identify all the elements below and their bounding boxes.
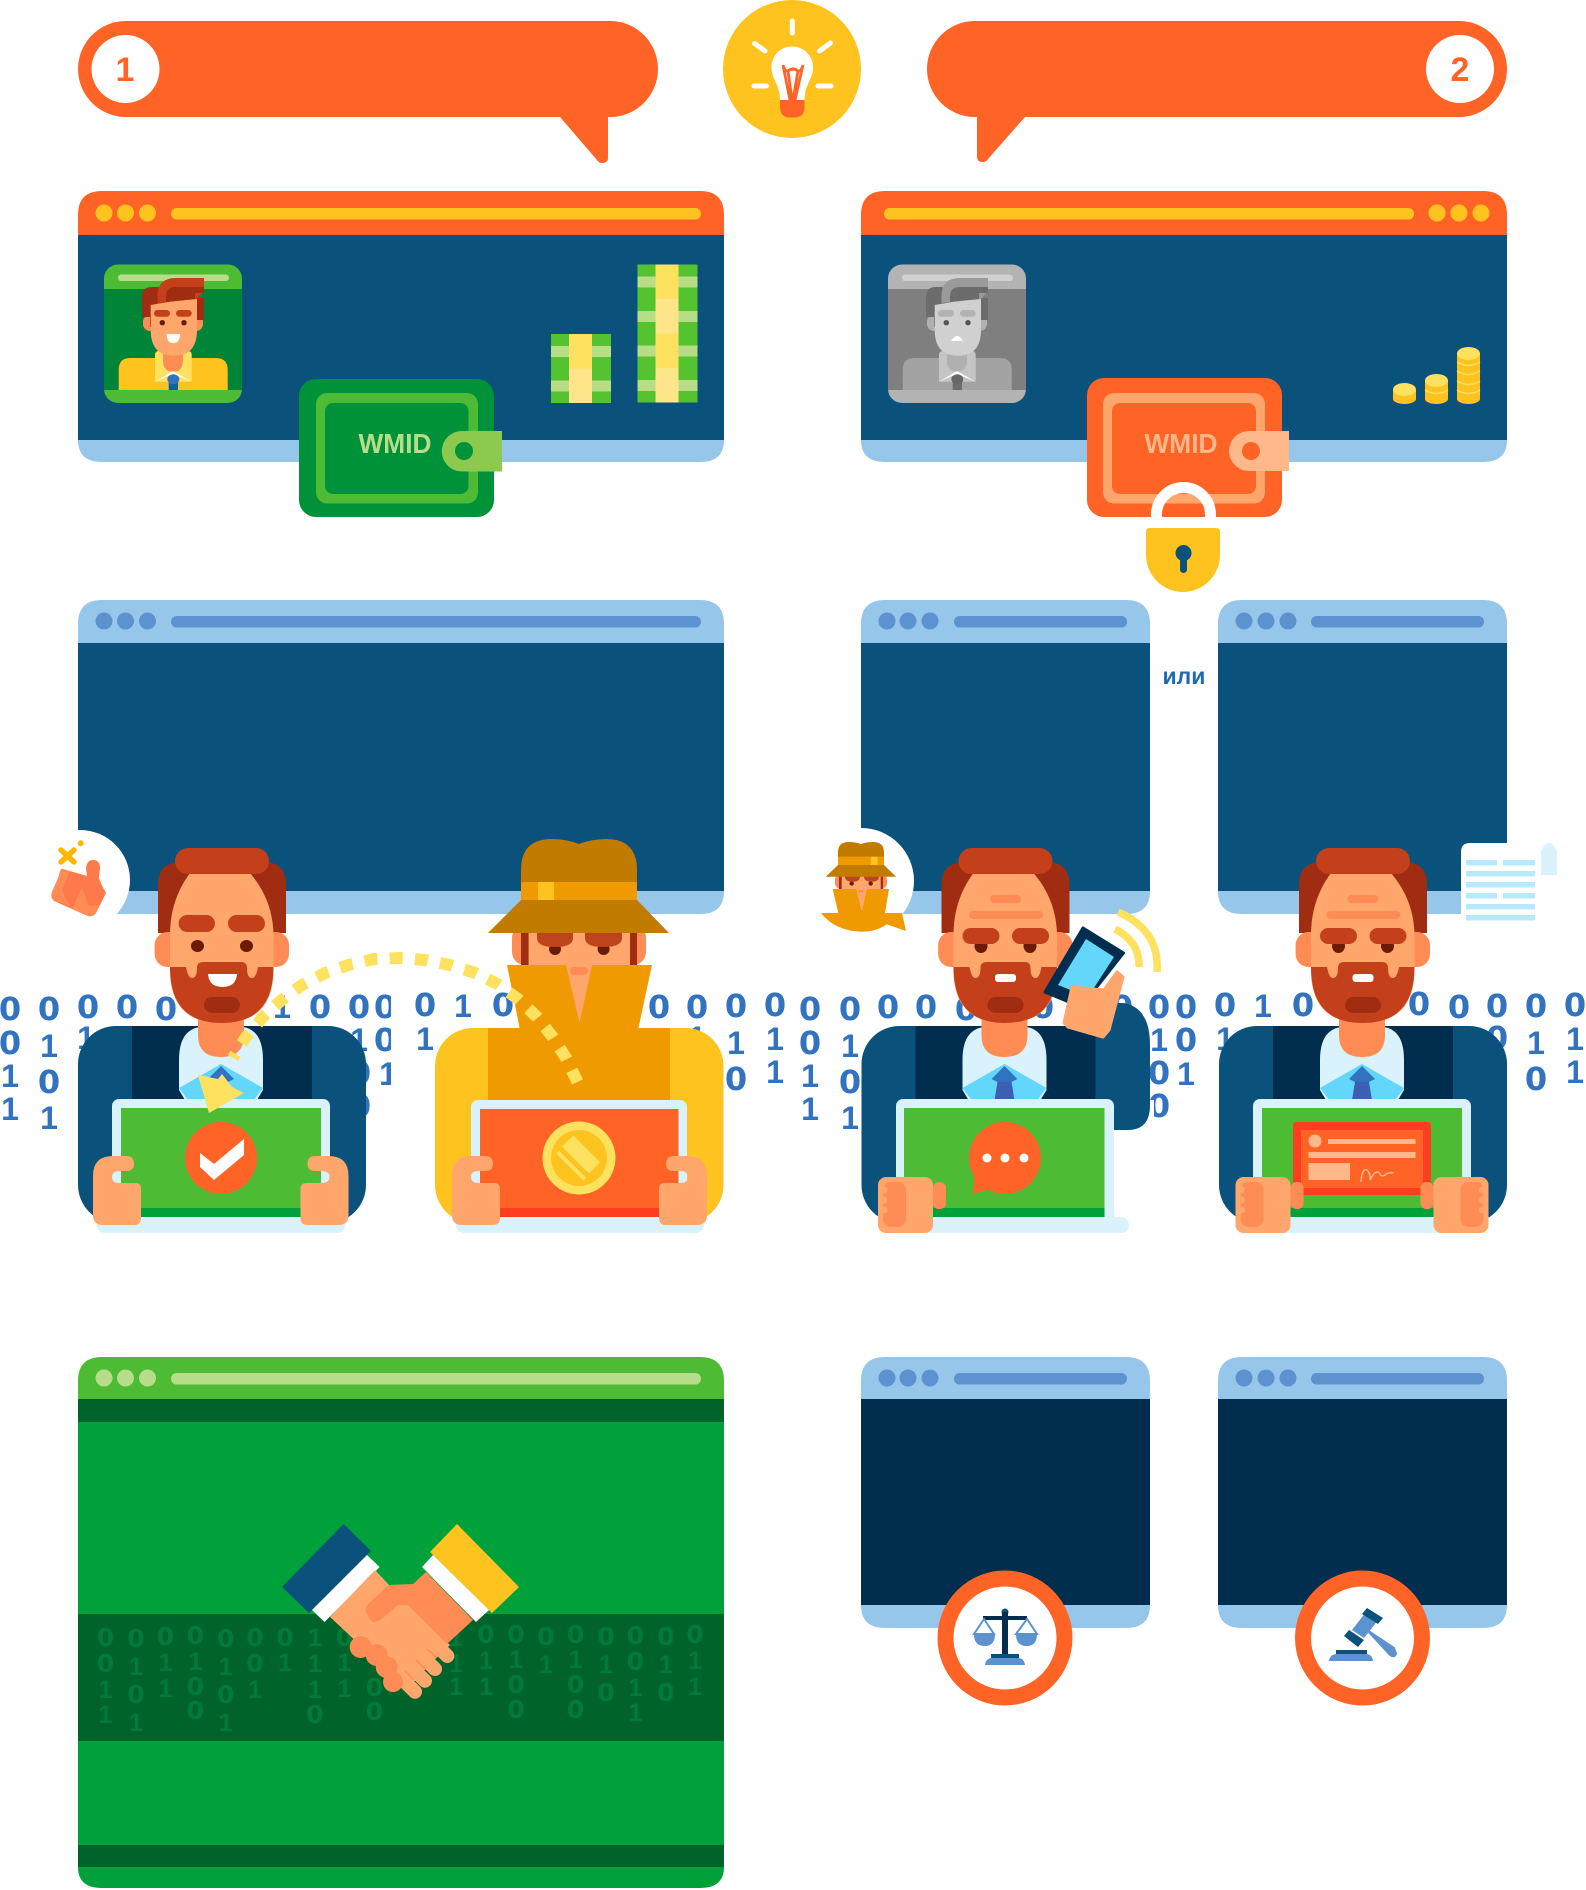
binary digits in band: 1 <box>308 1676 322 1704</box>
binary digits in band: 1 <box>158 1675 172 1703</box>
binary digits background right: 1 <box>1216 1021 1234 1057</box>
binary digits background centre: 0 <box>648 988 670 1026</box>
binary digits background right: 0 <box>1214 986 1236 1024</box>
binary digits in band: 0 <box>127 1680 145 1709</box>
panel: browser window with green wallet <box>78 191 724 517</box>
binary digits background centre: 0 <box>764 986 786 1024</box>
binary digits in band: 0 <box>217 1680 234 1709</box>
panel: large browser window <box>78 600 724 914</box>
binary digits background left <box>0 994 391 1129</box>
binary digits background mid right: 0 <box>799 1024 821 1062</box>
binary digits background left: 0 <box>77 988 99 1026</box>
binary digits in band: 0 <box>537 1622 555 1651</box>
binary digits background right: 1 <box>1527 1025 1545 1061</box>
binary digits background mid right: 0 <box>1111 988 1133 1026</box>
binary digits background mid right: 0 <box>877 988 899 1026</box>
binary digits in band: 0 <box>97 1623 114 1652</box>
binary digits in band: 0 <box>597 1678 615 1707</box>
binary digits background mid right: 0 <box>839 990 861 1028</box>
binary digits in band: 1 <box>219 1653 233 1681</box>
binary digits in band: 1 <box>688 1673 702 1701</box>
binary digits background mid right: 0 <box>1175 988 1197 1026</box>
binary digits in band: 1 <box>338 1675 352 1703</box>
binary digits background centre <box>414 986 786 1098</box>
binary digits in band: 0 <box>627 1621 644 1650</box>
icon: gavel in ring <box>1303 1578 1422 1698</box>
tablet <box>97 1099 345 1233</box>
person: spy with hat and tablet <box>435 839 724 1233</box>
raised arm <box>1100 1003 1150 1130</box>
panel: law window with gavel <box>1218 1357 1507 1698</box>
eyebrows and eyes <box>179 915 265 987</box>
binary digits in band <box>97 1620 704 1737</box>
binary digits background left: 0 <box>348 988 370 1026</box>
icon: handshake <box>282 1524 519 1692</box>
binary digits background left: 0 <box>309 988 331 1026</box>
binary digits in band: 0 <box>336 1623 353 1652</box>
binary digits background right: 0 <box>1564 986 1586 1024</box>
binary digits background left: 0 <box>349 1087 371 1125</box>
binary digits in band: 0 <box>187 1696 204 1725</box>
binary digits in band: 1 <box>629 1674 643 1702</box>
binary digits background right <box>1214 985 1586 1098</box>
binary digits background mid right: 0 <box>1148 1054 1170 1092</box>
binary digits background centre: 1 <box>416 1021 434 1057</box>
binary digits background right: 0 <box>1525 987 1547 1025</box>
binary digits background right: 1 <box>1566 1054 1584 1090</box>
green WMID wallet: WMID <box>358 428 432 459</box>
number 1: 1 <box>116 51 134 89</box>
binary digits in band: 0 <box>597 1622 615 1651</box>
person: bearded man with contract <box>1219 848 1507 1233</box>
binary digits background right: 0 <box>1408 985 1430 1023</box>
binary digits in band: 1 <box>569 1646 583 1674</box>
binary digits background mid right: 0 <box>1148 1087 1170 1125</box>
binary digits in band: 0 <box>187 1621 204 1650</box>
binary digits in band: 1 <box>129 1709 143 1737</box>
binary digits in band: 0 <box>627 1647 644 1676</box>
binary digits background left: 1 <box>379 1056 397 1092</box>
binary digits in band: 1 <box>338 1649 352 1677</box>
binary digits in band: 0 <box>306 1700 324 1729</box>
icon: mini spy bubble <box>808 828 914 934</box>
binary digits in band: 1 <box>479 1647 493 1675</box>
laptop <box>890 1099 1129 1233</box>
binary digits in band: 0 <box>567 1620 584 1649</box>
binary digits background centre: 1 <box>688 1020 706 1056</box>
icon: check mark <box>185 1122 257 1194</box>
binary digits in band: 1 <box>659 1651 673 1679</box>
binary digits in band: 1 <box>219 1709 233 1737</box>
binary digits background mid right: 0 <box>799 990 821 1028</box>
binary digits in band: 0 <box>507 1620 525 1649</box>
binary digits in band: 1 <box>539 1651 553 1679</box>
binary digits background left: 0 <box>38 990 60 1028</box>
binary digits background left: 1 <box>40 1100 58 1136</box>
binary digits background mid right: 0 <box>1148 988 1170 1026</box>
green WMID wallet <box>299 379 502 517</box>
binary digits in band: 1 <box>688 1647 702 1675</box>
binary digits in band: 0 <box>507 1695 525 1724</box>
binary digits background centre: 0 <box>492 986 514 1024</box>
binary digits background mid right: 1 <box>841 1100 859 1136</box>
icon: signal waves <box>1115 912 1157 972</box>
speech bubble 1 <box>78 21 658 163</box>
binary digits in band: 0 <box>477 1620 495 1649</box>
binary digits background mid right: 1 <box>841 1028 859 1064</box>
binary digits background centre: 0 <box>725 987 747 1025</box>
binary digits in band: 1 <box>599 1651 613 1679</box>
binary digits background mid right: 1 <box>801 1058 819 1094</box>
binary digits in band: 1 <box>479 1673 493 1701</box>
binary digits background left: 1 <box>273 989 291 1025</box>
binary digits in band: 1 <box>158 1649 172 1677</box>
binary digits background mid right: 0 <box>1175 1021 1197 1059</box>
binary digits background left: 1 <box>1 1058 19 1094</box>
binary digits background mid right <box>799 988 1197 1136</box>
binary digits in band: 1 <box>629 1699 643 1727</box>
binary digits in band: 1 <box>308 1650 322 1678</box>
binary digits in band: 0 <box>686 1620 704 1649</box>
binary digits in band: 1 <box>188 1648 202 1676</box>
binary digits in band: 0 <box>366 1673 383 1702</box>
panel: browser window with locked orange wallet <box>861 191 1507 592</box>
icon: padlock <box>1146 488 1220 592</box>
binary digits background left: 1 <box>40 1028 58 1064</box>
orange WMID wallet: WMID <box>1144 428 1218 459</box>
laptop with contract <box>1250 1099 1475 1233</box>
binary digits background centre: 0 <box>686 988 708 1026</box>
orange WMID wallet <box>1087 378 1289 517</box>
binary digits background left: 0 <box>116 988 138 1026</box>
binary digits in band: 0 <box>366 1697 383 1726</box>
binary digits in band: 0 <box>246 1623 264 1652</box>
icon: thumbs up bubble <box>30 830 130 930</box>
icon: chat bubble <box>969 1122 1041 1194</box>
eyebrows, eyes and forehead <box>962 895 1049 982</box>
binary digits background centre: 0 <box>725 1060 747 1098</box>
panel: browser window right of or <box>1218 600 1507 914</box>
binary digits background left: 0 <box>232 988 254 1026</box>
binary digits background left: 0 <box>374 1021 396 1059</box>
binary digits in band: 0 <box>657 1678 675 1707</box>
money stack tall <box>638 264 698 402</box>
binary digits background centre: 1 <box>766 1054 784 1090</box>
binary digits background mid right: 1 <box>1177 1056 1195 1092</box>
jacket cut away on phone side <box>1114 1100 1154 1225</box>
text: or: или <box>1163 663 1205 689</box>
binary digits in band: 1 <box>129 1653 143 1681</box>
binary digits background mid right: 0 <box>955 990 977 1028</box>
binary digits in band: 0 <box>276 1623 294 1652</box>
binary digits in band: 0 <box>127 1624 145 1653</box>
binary digits background right: 0 <box>1525 1060 1547 1098</box>
binary digits background right: 0 <box>1486 1019 1508 1057</box>
coat <box>435 1028 724 1223</box>
binary digits background left: 1 <box>1 1091 19 1127</box>
binary digits background right: 0 <box>1486 987 1508 1025</box>
binary digits in band: 1 <box>509 1646 523 1674</box>
binary digits background right: 0 <box>1292 986 1314 1024</box>
person: happy bearded man with tablet <box>78 848 366 1233</box>
eyebrows, eyes and forehead <box>1320 895 1406 982</box>
binary digits background mid right: 1 <box>1150 1022 1168 1058</box>
collar <box>507 965 652 1030</box>
binary digits in band: 1 <box>99 1676 113 1704</box>
binary digits background left: 0 <box>155 990 177 1028</box>
icon: contract <box>1293 1122 1431 1195</box>
binary digits in band: 1 <box>308 1624 322 1652</box>
binary digits in band: 0 <box>657 1622 675 1651</box>
phone <box>1045 928 1124 1037</box>
binary digits in band: 1 <box>278 1649 292 1677</box>
avatar: happy man <box>104 264 242 403</box>
number 2: 2 <box>1451 51 1469 89</box>
avatar: sad grey man <box>888 264 1026 403</box>
money stack short <box>551 334 611 403</box>
speech bubble 2 <box>927 21 1507 162</box>
coin stacks <box>1393 347 1480 404</box>
binary digits in band: 1 <box>449 1650 463 1678</box>
binary digits in band: 0 <box>187 1672 204 1701</box>
binary digits in band: 0 <box>97 1649 114 1678</box>
icon: light bulb <box>723 0 861 138</box>
panel: law window with scales <box>861 1357 1150 1698</box>
face under hat <box>512 925 646 973</box>
binary digits background centre: 1 <box>727 1025 745 1061</box>
binary digits in band: 0 <box>246 1649 264 1678</box>
icon: scales in ring <box>946 1578 1064 1698</box>
icon: document <box>1461 843 1557 925</box>
binary digits background mid right: 0 <box>915 988 937 1026</box>
binary digits background left: 0 <box>38 1063 60 1101</box>
binary digits in band: 1 <box>99 1701 113 1729</box>
binary digits background centre: 0 <box>414 986 436 1024</box>
binary digits background mid right: 1 <box>801 1091 819 1127</box>
person: bearded man on the phone with laptop <box>862 848 1157 1233</box>
binary digits background centre: 1 <box>454 988 472 1024</box>
binary digits in band: 0 <box>217 1624 234 1653</box>
binary digits background left: 0 <box>374 988 396 1026</box>
binary digits background left: 1 <box>350 1022 368 1058</box>
binary digits in band: 0 <box>507 1670 525 1699</box>
binary digits in band: 0 <box>157 1622 174 1651</box>
panel: green handshake window <box>78 1357 724 1888</box>
binary digits background centre: 1 <box>766 1021 784 1057</box>
hat <box>488 839 669 933</box>
binary digits background right: 1 <box>1254 988 1272 1024</box>
binary digits background right: 0 <box>1448 988 1470 1026</box>
binary digits in band: 1 <box>449 1624 463 1652</box>
tablet <box>456 1100 704 1233</box>
binary digits in band: 1 <box>248 1676 262 1704</box>
binary digits background left: 1 <box>77 1020 95 1056</box>
binary digits background right: 1 <box>1566 1021 1584 1057</box>
icon: gold coin <box>542 1122 616 1194</box>
binary digits in band: 0 <box>567 1670 584 1699</box>
arrow: dotted transfer arc <box>198 958 578 1113</box>
binary digits background mid right: 0 <box>1032 988 1054 1026</box>
binary digits background mid right: 0 <box>839 1063 861 1101</box>
binary digits in band: 0 <box>567 1695 584 1724</box>
binary digits in band: 1 <box>449 1673 463 1701</box>
panel: browser window left of or <box>861 600 1150 914</box>
binary digits background left: 0 <box>349 1054 371 1092</box>
